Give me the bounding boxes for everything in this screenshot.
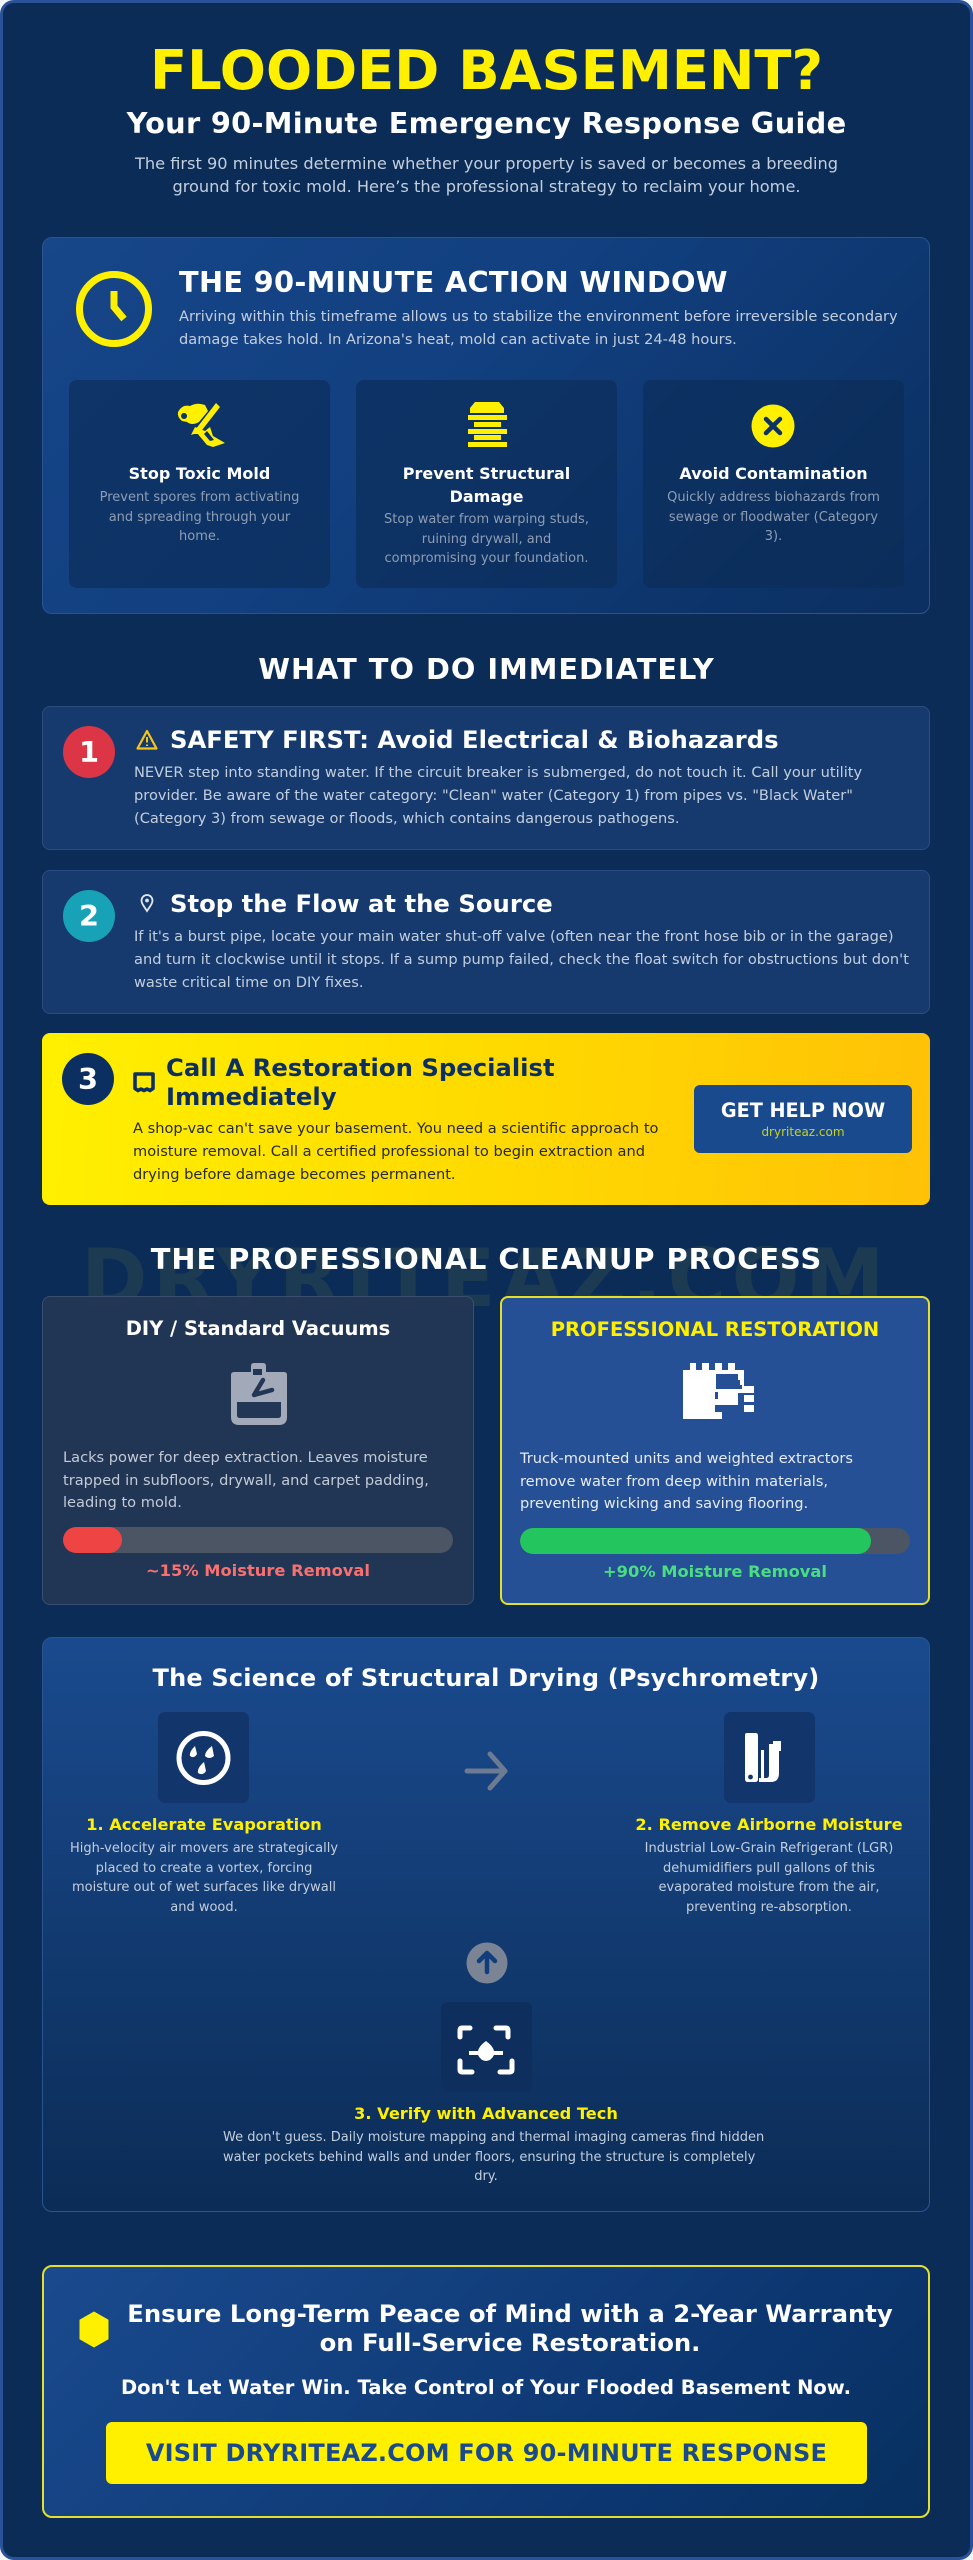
panel text: remove water from deep within materials, bbox=[520, 1473, 828, 1490]
warranty heading bbox=[127, 2299, 893, 2357]
panel text bbox=[179, 308, 898, 348]
step title: 3. Verify with Advanced Tech bbox=[354, 2104, 618, 2123]
step: verify with advanced tech bbox=[223, 2002, 764, 2184]
card text: home. bbox=[179, 529, 220, 544]
step 3: call a restoration specialist bbox=[42, 1033, 930, 1205]
step text: NEVER step into standing water. If the circuit breaker is submerged, do not touch it. Call your utility bbox=[134, 764, 862, 781]
card text bbox=[667, 490, 880, 544]
subtitle: Your 90-Minute Emergency Response Guide bbox=[127, 106, 846, 140]
card title bbox=[403, 464, 570, 506]
step text: evaporated moisture from the air, bbox=[658, 1880, 880, 1895]
icon: thermal scan bbox=[441, 2002, 532, 2092]
icon: warning bbox=[136, 730, 158, 750]
step 2: stop the flow bbox=[42, 870, 930, 1014]
step text bbox=[70, 1841, 338, 1914]
bar label: ~15% Moisture Removal bbox=[146, 1561, 370, 1580]
step text bbox=[134, 764, 862, 827]
panel title: The Science of Structural Drying (Psychrometry) bbox=[152, 1664, 819, 1692]
panel text: damage takes hold. In Arizona's heat, mold can activate in just 24-48 hours. bbox=[179, 331, 737, 348]
watermark: DRYRITEAZ.COM bbox=[81, 1232, 890, 1325]
panel: DIY vacuums bbox=[42, 1296, 474, 1605]
step text: drying before damage becomes permanent. bbox=[133, 1166, 456, 1183]
step title: 2. Remove Airborne Moisture bbox=[635, 1815, 903, 1834]
card text: ruining drywall, and bbox=[422, 532, 551, 546]
step text: provider. Be aware of the water category: "Clean" water (Category 1) from pipes vs. "Black Water" bbox=[134, 787, 853, 804]
step text: A shop-vac can't save your basement. You need a scientific approach to bbox=[133, 1120, 658, 1137]
step heading: Immediately bbox=[166, 1082, 337, 1111]
step number bbox=[63, 726, 115, 778]
button: get help now bbox=[694, 1085, 912, 1153]
panel: 90-minute action window bbox=[42, 237, 930, 614]
step text: waste critical time on DIY fixes. bbox=[134, 974, 363, 991]
card title: Damage bbox=[450, 487, 523, 506]
panel heading: THE 90-MINUTE ACTION WINDOW bbox=[179, 265, 728, 299]
icon: dehumidifier bbox=[724, 1712, 815, 1803]
step text: We don't guess. Daily moisture mapping and thermal imaging cameras find hidden bbox=[223, 2130, 764, 2145]
button: visit website bbox=[106, 2422, 867, 2484]
step: remove airborne moisture bbox=[635, 1712, 903, 1914]
card title: Stop Toxic Mold bbox=[129, 464, 270, 483]
step text bbox=[134, 928, 909, 991]
card text: Quickly address biohazards from bbox=[667, 490, 880, 505]
warranty heading: Ensure Long-Term Peace of Mind with a 2-Year Warranty bbox=[127, 2299, 893, 2328]
step heading bbox=[166, 1053, 555, 1111]
panel text: preventing wicking and saving flooring. bbox=[520, 1495, 808, 1512]
icon: shop vac bbox=[231, 1363, 287, 1425]
step text: If it's a burst pipe, locate your main water shut-off valve (often near the front hose bib or in the garage) bbox=[134, 928, 894, 945]
panel text bbox=[63, 1449, 429, 1511]
step heading: SAFETY FIRST: Avoid Electrical & Biohazards bbox=[170, 725, 779, 754]
panel: science of structural drying bbox=[42, 1637, 930, 2212]
step number bbox=[63, 890, 115, 942]
intro text: ground for toxic mold. Here’s the professional strategy to reclaim your home. bbox=[172, 177, 801, 196]
step text: dry. bbox=[474, 2169, 498, 2184]
warranty heading: on Full-Service Restoration. bbox=[320, 2328, 700, 2357]
step text: moisture out of wet surfaces like drywall bbox=[72, 1880, 336, 1895]
icon: air mover bbox=[158, 1712, 249, 1803]
panel title: PROFESSIONAL RESTORATION bbox=[551, 1318, 879, 1341]
step title: 1. Accelerate Evaporation bbox=[86, 1815, 322, 1834]
icon: foundation bbox=[468, 402, 507, 447]
intro text bbox=[134, 154, 838, 196]
card: avoid contamination bbox=[643, 380, 904, 588]
step text: High-velocity air movers are strategically bbox=[70, 1841, 338, 1856]
bar fill bbox=[520, 1528, 871, 1554]
card text: and spreading through your bbox=[109, 510, 290, 524]
heading: professional cleanup process: THE PROFESSIONAL CLEANUP PROCESS bbox=[151, 1242, 822, 1276]
panel text: Truck-mounted units and weighted extractors bbox=[520, 1450, 853, 1467]
card title: Avoid Contamination bbox=[679, 464, 868, 483]
panel: warranty call to action bbox=[42, 2265, 930, 2518]
card text: Stop water from warping studs, bbox=[384, 512, 589, 527]
step heading: Stop the Flow at the Source bbox=[170, 889, 553, 918]
step text: moisture removal. Call a certified professional to begin extraction and bbox=[133, 1143, 645, 1160]
arrow: right bbox=[464, 1752, 508, 1790]
card text: 3). bbox=[765, 529, 782, 544]
progress bar: 90% bbox=[520, 1528, 910, 1554]
step: accelerate evaporation bbox=[70, 1712, 338, 1914]
card: stop toxic mold bbox=[69, 380, 330, 588]
step text: water pockets behind walls and under floors, ensuring the structure is completely bbox=[223, 2150, 755, 2164]
step text: and turn it clockwise until it stops. If a sump pump failed, check the float switch for obstructions but don't bbox=[134, 951, 909, 968]
step text bbox=[223, 2130, 764, 2184]
icon: extractor truck bbox=[683, 1363, 754, 1419]
step 1: safety first bbox=[42, 706, 930, 850]
icon: clock bbox=[76, 271, 152, 347]
icon: x circle bbox=[752, 404, 794, 448]
heading: what to do immediately: WHAT TO DO IMMEDIATELY bbox=[258, 652, 715, 686]
warranty subheading: Don't Let Water Win. Take Control of Your Flooded Basement Now. bbox=[121, 2376, 851, 2399]
step text: Industrial Low-Grain Refrigerant (LGR) bbox=[645, 1841, 893, 1856]
step text: placed to create a vortex, forcing bbox=[96, 1860, 312, 1876]
icon: van bbox=[133, 1072, 155, 1092]
step text bbox=[645, 1841, 893, 1914]
progress bar: 15% bbox=[63, 1527, 453, 1553]
panel text: Lacks power for deep extraction. Leaves moisture bbox=[63, 1449, 428, 1466]
icon: map pin bbox=[140, 894, 154, 912]
step text bbox=[133, 1120, 658, 1183]
step text: preventing re-absorption. bbox=[686, 1900, 852, 1914]
panel title: DIY / Standard Vacuums bbox=[126, 1317, 390, 1340]
button url: dryriteaz.com bbox=[761, 1125, 845, 1139]
intro text: The first 90 minutes determine whether your property is saved or becomes a breeding bbox=[135, 154, 838, 173]
card text: compromising your foundation. bbox=[385, 551, 588, 566]
header bbox=[126, 39, 846, 196]
card text: Prevent spores from activating bbox=[100, 490, 299, 505]
arrow: up circle bbox=[466, 1942, 508, 1984]
step text: and wood. bbox=[170, 1900, 238, 1914]
card text bbox=[384, 512, 589, 566]
panel text: Arriving within this timeframe allows us to stabilize the environment before irreversible secondary bbox=[179, 308, 898, 325]
step number: 2 bbox=[79, 899, 99, 933]
panel: professional restoration bbox=[500, 1296, 930, 1605]
panel text: trapped in subfloors, drywall, and carpet padding, bbox=[63, 1472, 429, 1489]
step number: 1 bbox=[79, 735, 99, 769]
button label: VISIT DRYRITEAZ.COM FOR 90-MINUTE RESPONSE bbox=[146, 2439, 827, 2467]
step number: 3 bbox=[78, 1062, 98, 1096]
icon: shield hexagon bbox=[80, 2312, 108, 2348]
step text: dehumidifiers pull gallons of this bbox=[663, 1860, 875, 1876]
button label: GET HELP NOW bbox=[721, 1099, 885, 1122]
step number bbox=[62, 1053, 114, 1105]
step heading: Call A Restoration Specialist bbox=[166, 1053, 555, 1082]
title: FLOODED BASEMENT? bbox=[150, 39, 823, 102]
panel text bbox=[520, 1450, 853, 1512]
card title: Prevent Structural bbox=[403, 464, 570, 483]
step text: (Category 3) from sewage or floods, which contains dangerous pathogens. bbox=[134, 810, 680, 827]
card text: sewage or floodwater (Category bbox=[669, 510, 878, 524]
icon: mold bbox=[178, 403, 225, 447]
bar label: +90% Moisture Removal bbox=[603, 1562, 827, 1581]
bar fill bbox=[63, 1527, 122, 1553]
card: prevent structural damage bbox=[356, 380, 617, 588]
card text bbox=[100, 490, 299, 544]
panel text: leading to mold. bbox=[63, 1494, 182, 1511]
